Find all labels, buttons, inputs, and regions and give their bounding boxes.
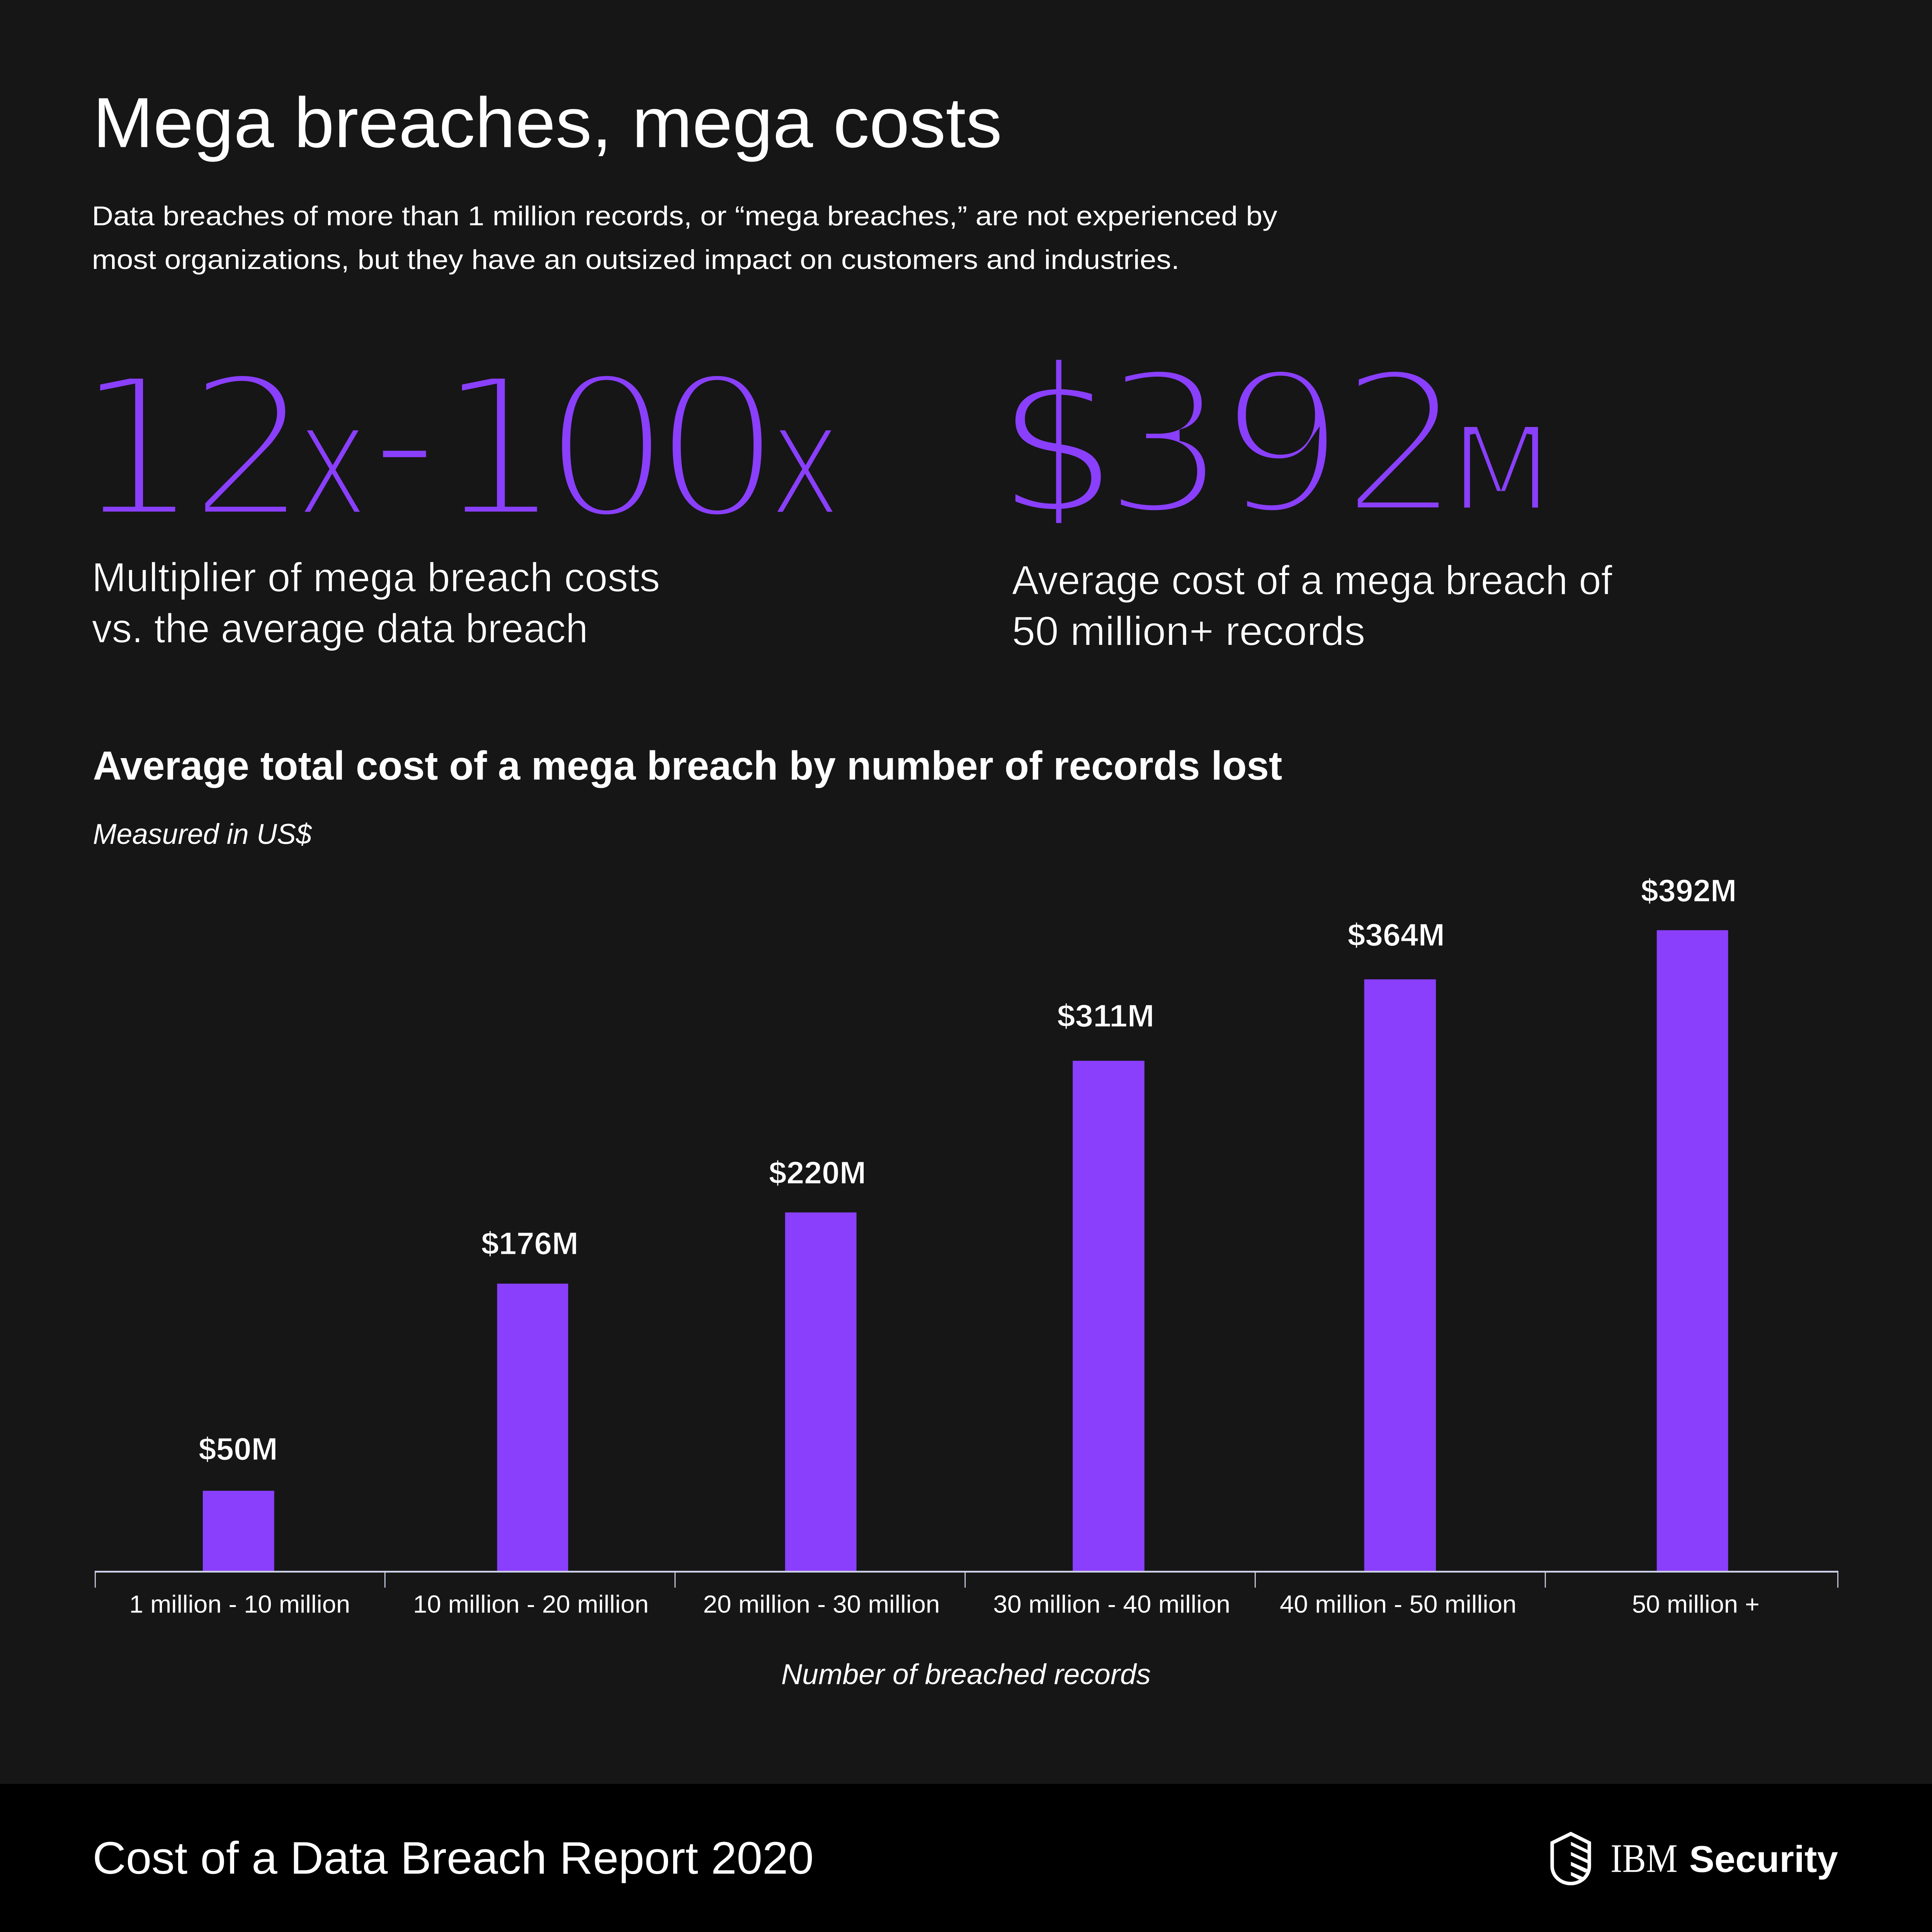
bar chart: [95, 873, 1838, 1690]
intro text block: [92, 201, 1277, 275]
chart unit note: Measured in US$: [93, 818, 312, 850]
bar: 20 million - 30 million: $220M: [769, 1155, 866, 1190]
bar: 50 million +: [1641, 873, 1736, 1571]
bar: 1 million - 10 million: $50M: [199, 1432, 278, 1467]
multiplier caption: [92, 555, 660, 651]
bar: 30 million - 40 million: [1057, 998, 1154, 1571]
icon: IBM Security shield: [1552, 1834, 1589, 1884]
intro text block: most organizations, but they have an outsized impact on customers and industries.: [92, 245, 1179, 275]
bar: 40 million - 50 million: $364M: [1348, 918, 1445, 952]
x axis category labels: 30 million - 40 million: [993, 1590, 1230, 1618]
big number: 12x-100x: -: [369, 325, 440, 555]
bar: 1 million - 10 million: [199, 1432, 278, 1571]
footer band: [0, 1784, 1932, 1932]
panel: average cost stat: [995, 330, 1612, 654]
x axis category labels: 1 million - 10 million: [129, 1590, 350, 1618]
big number: $392M: M: [1450, 401, 1553, 539]
IBM Security wordmark: IBM: [1611, 1836, 1678, 1881]
x axis title: Number of breached records: [781, 1658, 1151, 1690]
average cost caption: [1012, 558, 1612, 654]
average cost caption: 50 million+ records: [1012, 609, 1365, 654]
big number: 12x-100x: 12: [72, 334, 312, 565]
x axis category labels: 50 million +: [1632, 1590, 1760, 1618]
footer report title: Cost of a Data Breach Report 2020: [93, 1833, 814, 1884]
x axis category labels: 20 million - 30 million: [703, 1590, 940, 1618]
x axis category labels: 10 million - 20 million: [413, 1590, 649, 1618]
bar: 10 million - 20 million: $176M: [481, 1226, 578, 1261]
big number: $392M: $: [995, 330, 1122, 560]
title: Mega breaches, mega costs: [93, 83, 1002, 163]
big number: $392M: 392: [1100, 330, 1464, 560]
panel: multiplier stat: [72, 325, 844, 651]
multiplier caption: vs. the average data breach: [92, 606, 588, 651]
bar: 20 million - 30 million: [769, 1155, 866, 1571]
big number: 12x-100x: 100: [434, 334, 781, 565]
chart heading: Average total cost of a mega breach by number of records lost: [93, 743, 1282, 789]
intro text block: Data breaches of more than 1 million records, or “mega breaches,” are not experienced by: [92, 201, 1277, 231]
big number: 12x-100x: x: [767, 364, 844, 555]
bar: 40 million - 50 million: [1348, 918, 1445, 1571]
IBM Security wordmark: [1611, 1836, 1838, 1881]
x axis with ticks: [95, 1571, 1838, 1588]
bar: 10 million - 20 million: [481, 1226, 578, 1571]
bar: 30 million - 40 million: $311M: [1057, 998, 1154, 1034]
big number: 12x-100x: x: [294, 364, 371, 555]
x axis category labels: 40 million - 50 million: [1280, 1590, 1517, 1618]
IBM Security wordmark: Security: [1689, 1839, 1838, 1880]
multiplier caption: Multiplier of mega breach costs: [92, 555, 660, 600]
x axis category labels: [129, 1590, 1760, 1618]
dollar sign vertical stroke: [1056, 360, 1061, 523]
bar: 50 million +: $392M: [1641, 873, 1736, 908]
average cost caption: Average cost of a mega breach of: [1012, 558, 1612, 603]
